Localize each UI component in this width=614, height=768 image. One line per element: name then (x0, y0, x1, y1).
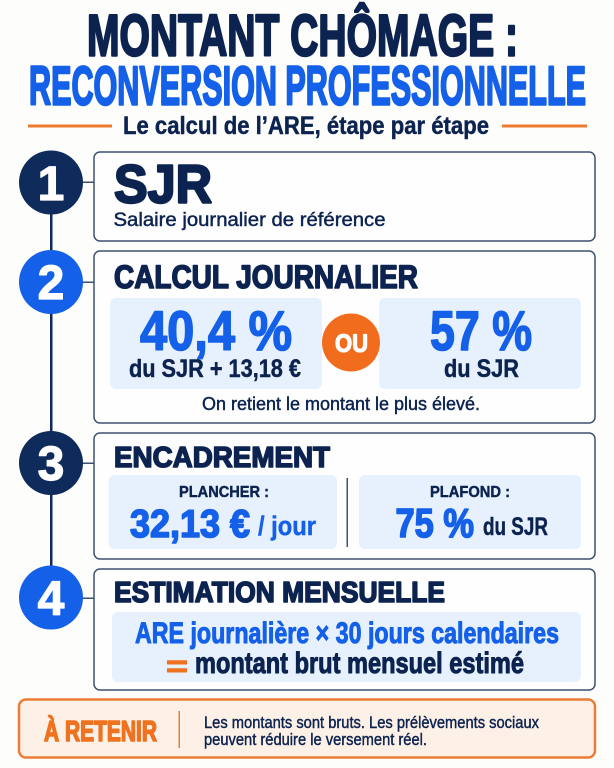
formula: = (166, 650, 188, 683)
panel: SJR (94, 152, 595, 241)
option: 57 %: du SJR (444, 355, 519, 383)
callout label: À RETENIR (44, 714, 157, 748)
plancher: 32,13 € (130, 503, 250, 546)
panel: encadrement (94, 433, 595, 559)
heading: calcul journalier: CALCUL JOURNALIER (114, 259, 418, 295)
callout: à retenir (19, 700, 595, 758)
plafond: du SJR (483, 513, 548, 541)
heading: SJR: SJR (114, 154, 212, 214)
callout text: peuvent réduire le versement réel. (204, 730, 427, 749)
step 4 badge: 4 (38, 573, 65, 626)
heading: estimation mensuelle: ESTIMATION MENSUELLE (114, 577, 445, 609)
option: 40,4 %: du SJR + 13,18 € (129, 355, 301, 383)
note: montant retenu: On retient le montant le plus élevé. (202, 394, 480, 414)
formula: montant brut mensuel estimé (195, 647, 524, 680)
timeline connector (50, 182, 95, 599)
panel: estimation mensuelle (94, 569, 595, 690)
step 3 badge: 3 (38, 438, 64, 491)
step 1 badge: 1 (38, 158, 64, 211)
formula (112, 612, 581, 683)
option: 57 % (379, 298, 581, 389)
subtitle: Le calcul de l’ARE, étape par étape (123, 112, 489, 140)
step 2 badge: 2 (38, 257, 64, 310)
step 3 badge (19, 431, 83, 495)
description: SJR: Salaire journalier de référence (114, 210, 386, 231)
title (29, 4, 586, 116)
step 2 badge (19, 250, 83, 314)
badge: OU: OU (335, 330, 368, 358)
plancher: PLANCHER : (179, 484, 269, 501)
plancher: / jour (258, 511, 316, 541)
plafond: PLAFOND : (430, 484, 510, 501)
panel: calcul journalier (94, 251, 595, 423)
step 4 badge (19, 566, 83, 630)
plancher (108, 475, 337, 549)
callout text: Les montants sont bruts. Les prélèvements sociaux (204, 713, 539, 732)
badge: OU (322, 314, 380, 372)
step 1 badge (19, 150, 83, 214)
callout text (204, 713, 539, 749)
option: 57 %: 57 % (430, 299, 532, 362)
heading: encadrement: ENCADREMENT (114, 442, 330, 474)
plafond: 75 % (396, 500, 474, 546)
option: 40,4 % (110, 298, 322, 389)
option: 40,4 %: 40,4 % (140, 299, 292, 362)
plafond (359, 475, 581, 549)
